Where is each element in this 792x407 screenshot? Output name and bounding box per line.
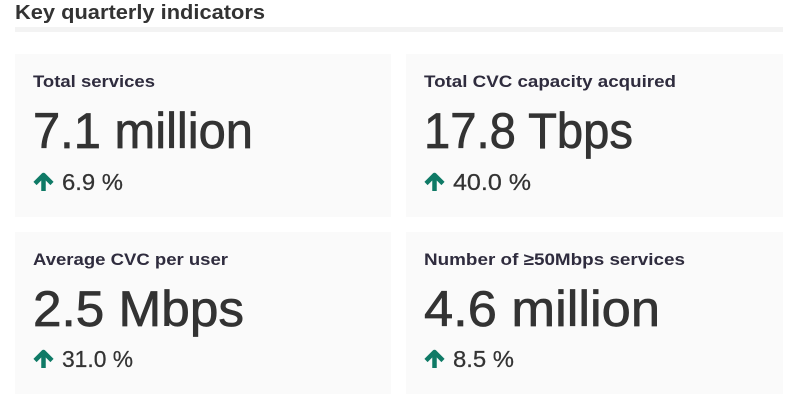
value: 7.1 million: 7.1 million (33, 103, 253, 159)
value: 4.6 million: 4.6 million (424, 281, 660, 337)
label: number of 50Mbps services: Number of ≥50Mbps services (424, 250, 685, 269)
icon: up arrow (426, 352, 443, 368)
change: 6.9 %: 6.9 % (62, 169, 123, 195)
icon: up arrow (35, 352, 52, 368)
icon: up arrow (426, 175, 443, 191)
label: total CVC capacity acquired: Total CVC capacity acquired (424, 72, 676, 91)
label: average CVC per user: Average CVC per user (33, 250, 228, 269)
change: 31.0 %: 31.0 % (62, 346, 133, 372)
change: 40.0 %: 40.0 % (453, 169, 531, 195)
change: 8.5 %: 8.5 % (453, 346, 514, 372)
panel: average CVC per user (15, 232, 391, 394)
panel: total services (15, 54, 391, 217)
value: 17.8 Tbps: 17.8 Tbps (424, 103, 633, 159)
panel: number of 50Mbps services (406, 232, 783, 394)
icon: up arrow (35, 175, 52, 191)
heading: Key quarterly indicators (15, 2, 265, 24)
label: total services: Total services (33, 72, 155, 91)
value: 2.5 Mbps: 2.5 Mbps (33, 281, 244, 337)
panel: total CVC capacity acquired (406, 54, 783, 217)
